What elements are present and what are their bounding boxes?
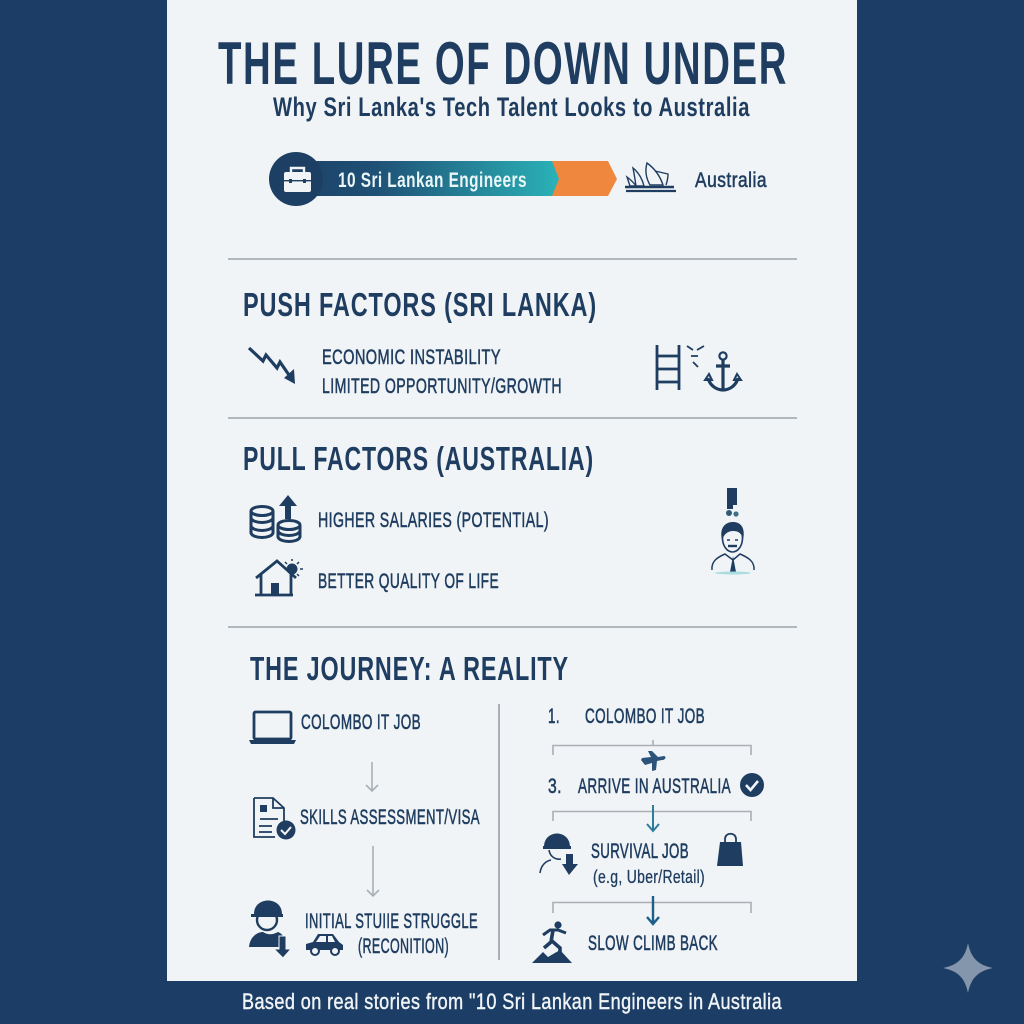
- icon: ladder: [657, 345, 679, 390]
- heading: the journey: THE JOURNEY: A REALITY: [250, 650, 569, 687]
- icon: shopping bag: [717, 834, 743, 866]
- icon: briefcase: [284, 168, 311, 192]
- push factor list: LIMITED OPPORTUNITY/GROWTH: [322, 375, 562, 398]
- icon: climber on mountain: [532, 921, 572, 963]
- icon: check badge: [740, 773, 764, 797]
- heading: push factors: PUSH FACTORS (SRI LANKA): [243, 286, 597, 323]
- icon: sydney opera house: [625, 163, 676, 191]
- icon: plane: [641, 751, 665, 771]
- icon: worried engineer with thought marks: [712, 488, 754, 574]
- white content panel: [167, 0, 857, 981]
- destination label: Australia: [695, 169, 767, 192]
- icon: falling zigzag arrow: [249, 348, 295, 384]
- banner label: 10 Sri Lankan Engineers: [338, 169, 527, 192]
- arrow: [367, 846, 379, 896]
- step: skills assessment: SKILLS ASSESSMENT/VISA: [300, 806, 480, 829]
- arrow: [366, 762, 378, 791]
- push factor list: [322, 346, 562, 398]
- icon: burst lines: [687, 346, 704, 367]
- icon: worker with down arrow: [249, 900, 291, 958]
- panel: right journey column: [532, 705, 764, 963]
- step detail: (e.g, Uber/Retail): [593, 867, 705, 887]
- icon: laptop: [249, 712, 296, 744]
- connector bracket with arrow: [553, 896, 751, 924]
- decorative sparkle: [943, 943, 993, 993]
- step: colombo it job: COLOMBO IT JOB: [585, 705, 705, 728]
- push factor list: ECONOMIC INSTABILITY: [322, 346, 501, 369]
- step: arrive in australia: ARRIVE IN AUSTRALIA: [578, 775, 731, 798]
- footer source line: Based on real stories from "10 Sri Lankan Engineers in Australia: [242, 989, 782, 1014]
- panel: left journey column: [249, 711, 480, 958]
- step: colombo it job: COLOMBO IT JOB: [301, 711, 421, 734]
- connector bracket: [553, 740, 751, 755]
- icon: car: [306, 934, 343, 955]
- pull item: higher salaries: HIGHER SALARIES (POTENTIAL): [318, 509, 549, 532]
- step: recognition: (RECONITION): [358, 935, 449, 958]
- subtitle: Why Sri Lanka's Tech Talent Looks to Australia: [273, 92, 750, 122]
- migration banner: [269, 152, 617, 206]
- step: survival job: SURVIVAL JOB: [591, 840, 689, 863]
- icon: anchor: [705, 352, 741, 390]
- step number 1: 1.: [548, 705, 560, 728]
- icon: document with check: [254, 798, 296, 840]
- icon: coins with up arrow: [251, 495, 300, 542]
- heading: pull factors: PULL FACTORS (AUSTRALIA): [243, 440, 594, 477]
- pull item: quality of life: BETTER QUALITY OF LIFE: [318, 570, 499, 593]
- step: slow climb back: SLOW CLIMB BACK: [588, 932, 718, 955]
- icon: house with sun: [255, 559, 303, 595]
- connector bracket with arrow: [553, 805, 751, 831]
- step: initial struggle: INITIAL STUIIE STRUGGLE: [305, 910, 478, 933]
- icon: worker with down arrow: [540, 834, 578, 875]
- step number 3: 3.: [548, 775, 562, 798]
